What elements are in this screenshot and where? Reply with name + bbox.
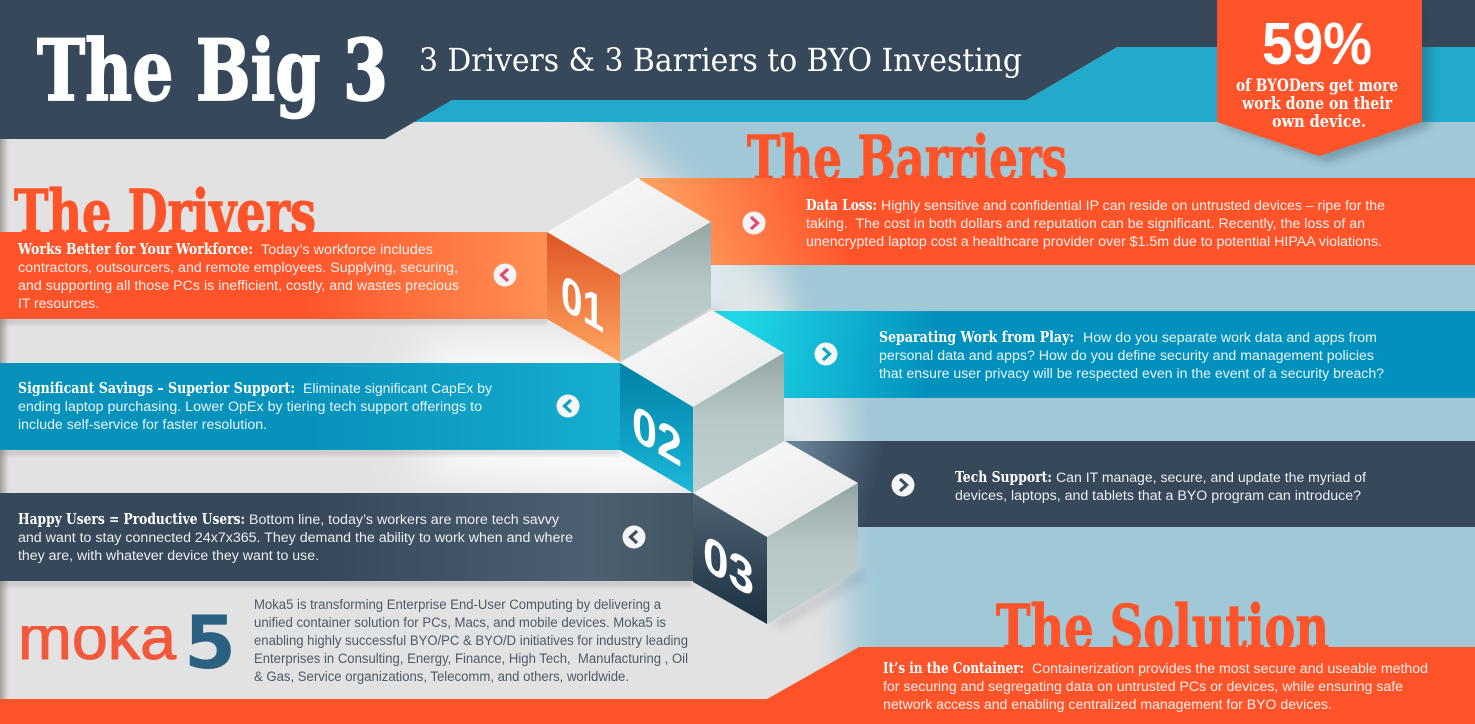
cube 01 (547, 178, 722, 366)
callout: 59% statistic (1217, 0, 1430, 162)
panel: driver 3: Happy Users = Productive Users: (18, 511, 245, 528)
panel: barrier 3: Tech Support: (955, 469, 1052, 486)
callout: 59% statistic: own device. (1272, 112, 1366, 132)
panel: driver 1: Today’s workforce includes (261, 242, 433, 258)
icon: left arrow 1 (494, 264, 516, 286)
panel: barrier 3: Can IT manage, secure, and update the myriad of (1056, 470, 1366, 486)
panel: driver 3: Bottom line, today’s workers are more tech savvy (249, 512, 560, 528)
icon: right arrow 2 (814, 342, 838, 366)
panel: barrier 1: Data Loss: (806, 197, 877, 214)
panel: driver 1: contractors, outsourcers, and remote employees. Supplying, securing, (18, 260, 458, 276)
header band (0, 0, 1475, 139)
panel: driver 3 (0, 493, 694, 586)
cube 03 (693, 441, 866, 628)
panel: barrier 1: taking. The cost in both dollars and reputation can be significant. Recently, the loss of an (806, 216, 1365, 232)
panel: driver 1 (0, 232, 548, 324)
logo: moka5 (22, 614, 231, 669)
logo: moka5: 5 (184, 601, 236, 686)
text block: about Moka5: & Gas, Service organizations, Telecomm, and others, worldwide. (254, 669, 629, 685)
panel: the solution (0, 647, 1475, 724)
panel: driver 1: and supporting all those PCs is inefficient, costly, and wastes precious (18, 278, 459, 294)
text block: about Moka5: enabling highly successful BYO/PC & BYO/D initiatives for industry leading (254, 633, 688, 649)
heading: The Barriers: The Barriers (747, 122, 1067, 195)
panel: the solution: Containerization provides the most secure and useable method (1032, 661, 1428, 677)
panel: driver 3: they are, with whatever device they want to use. (18, 548, 319, 564)
panel: the solution: It’s in the Container: (883, 660, 1024, 677)
panel: driver 2: Significant Savings – Superior Support: (18, 380, 295, 397)
text block: about Moka5: Moka5 is transforming Enterprise End-User Computing by delivering a (254, 597, 661, 613)
panel: driver 2: Eliminate significant CapEx by (303, 381, 493, 397)
panel: barrier 2: personal data and apps? How do you define security and management policies (879, 348, 1374, 364)
panel: driver 3: and want to stay connected 24x7x365. They demand the ability to work when and where (18, 530, 573, 546)
panel: barrier 2: Separating Work from Play: (879, 329, 1074, 346)
text block: about Moka5: Enterprises in Consulting, Energy, Finance, High Tech, Manufacturing , Oil (254, 651, 688, 667)
panel: driver 1: IT resources. (18, 296, 99, 312)
title: The Big 3 (37, 21, 388, 120)
icon: right arrow 3 (892, 474, 914, 496)
heading: The Drivers: The Drivers (14, 176, 316, 249)
panel: barrier 3: devices, laptops, and tablets that a BYO program can introduce? (955, 488, 1361, 504)
panel: driver 2 (0, 363, 621, 455)
panel: barrier 1 (640, 178, 1475, 265)
panel: the solution: network access and enabling centralized management for BYO devices. (883, 697, 1332, 713)
icon: left arrow 2 (556, 394, 580, 418)
heading: The Solution: The Solution (996, 591, 1329, 664)
callout: 59% statistic: 59% (1262, 11, 1372, 77)
cube 02: 02 (632, 394, 682, 479)
cube 01: 01 (561, 264, 604, 344)
cube 02 (620, 310, 795, 498)
panel: barrier 1: Highly sensitive and confidential IP can reside on untrusted devices – ripe for the (881, 198, 1385, 214)
panel: driver 1: Works Better for Your Workforce: (17, 241, 253, 258)
icon: right arrow 1 (742, 212, 766, 234)
panel: the solution: for securing and segregating data on untrusted PCs or devices, while ensuring safe (883, 679, 1403, 695)
subtitle: 3 Drivers & 3 Barriers to BYO Investing (419, 41, 1022, 79)
callout: 59% statistic: of BYODers get more (1236, 76, 1398, 96)
logo: moka5: moka (18, 601, 176, 673)
panel: barrier 2 (712, 311, 1475, 398)
text block: about Moka5 (254, 597, 688, 685)
panel: barrier 2: that ensure user privacy will be respected even in the event of a security breach? (879, 366, 1384, 382)
panel: barrier 3 (785, 441, 1475, 527)
panel: driver 2: include self-service for faster resolution. (18, 417, 267, 433)
panel: driver 2: ending laptop purchasing. Lower OpEx by tiering tech support offerings to (18, 399, 482, 415)
panel: barrier 1: unencrypted laptop cost a healthcare provider over $1.5m due to potential HIPAA violations. (806, 234, 1382, 250)
panel: barrier 2: How do you separate work data and apps from (1083, 330, 1377, 346)
cube 03: 03 (703, 524, 754, 609)
callout: 59% statistic: work done on their (1241, 94, 1393, 114)
text block: about Moka5: unified container solution for PCs, Macs, and mobile devices. Moka5 is (254, 615, 666, 631)
icon: left arrow 3 (622, 526, 646, 548)
